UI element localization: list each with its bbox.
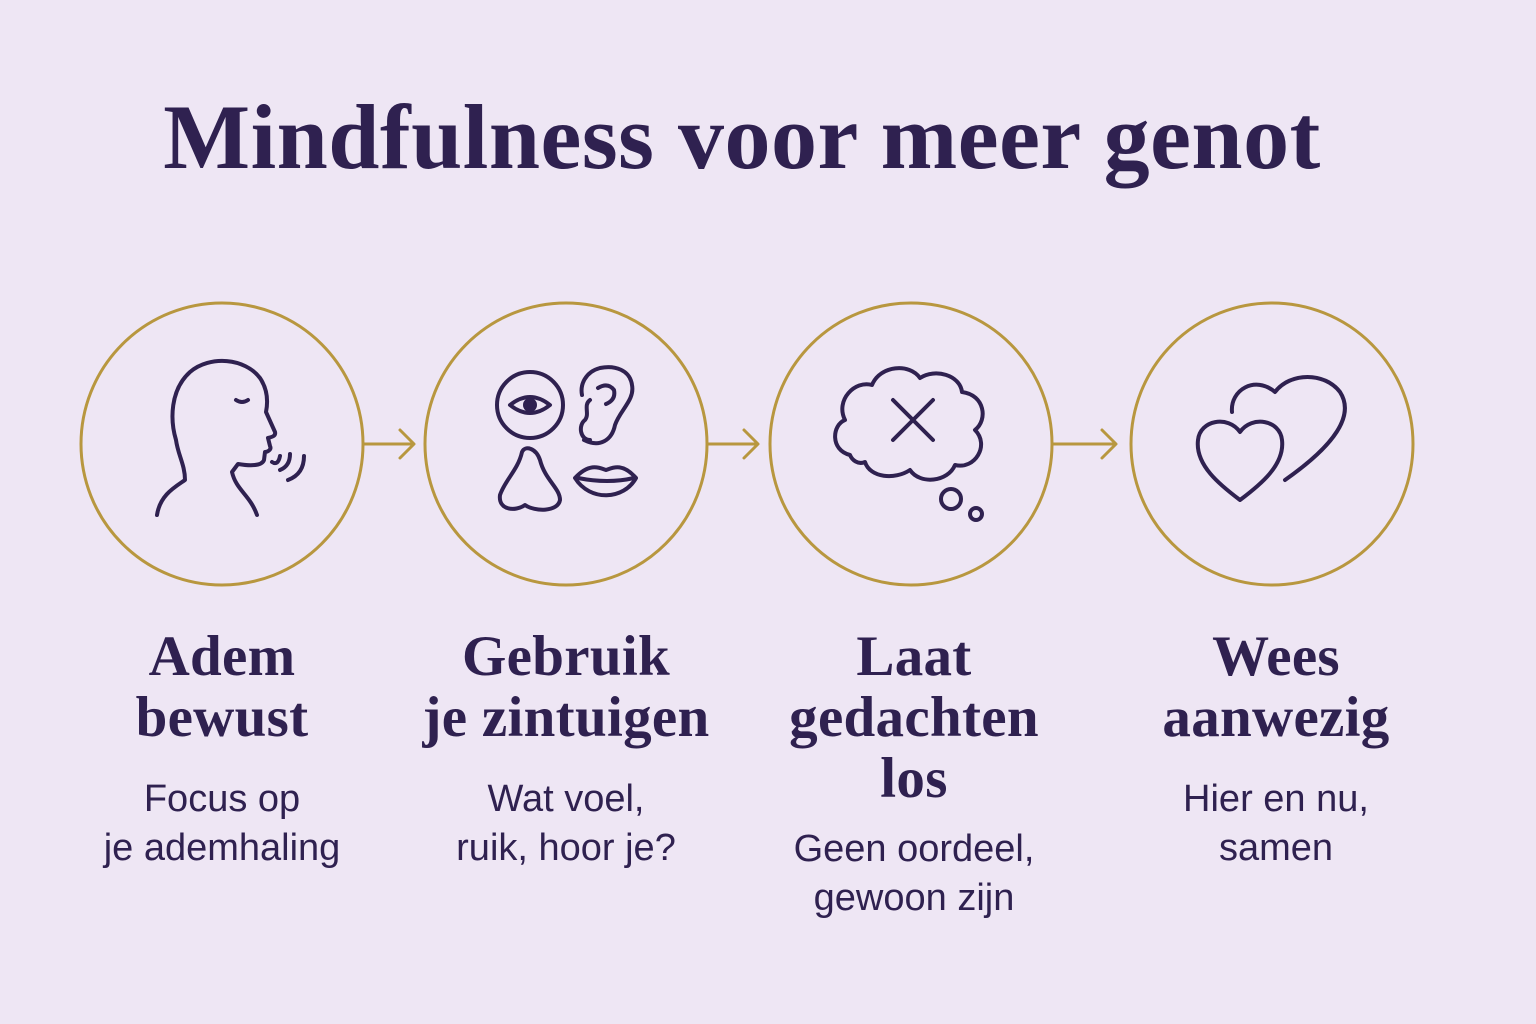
icon: thought cloud with X bbox=[835, 368, 983, 520]
circle 4 bbox=[1131, 303, 1413, 585]
step 4 text: samen bbox=[1219, 827, 1333, 869]
step 1 text: Adem bbox=[149, 625, 295, 688]
step 3 text bbox=[789, 625, 1039, 919]
step 1 text: bewust bbox=[136, 686, 308, 749]
icon: two hearts bbox=[1198, 377, 1345, 500]
step 2 text: Gebruik bbox=[462, 625, 670, 688]
circle 1 bbox=[81, 303, 363, 585]
step 3 text: gewoon zijn bbox=[814, 877, 1014, 919]
arrow 3 bbox=[1053, 430, 1116, 458]
step 4 text bbox=[1162, 625, 1390, 869]
arrow 2 bbox=[708, 430, 758, 458]
circle 3 bbox=[770, 303, 1052, 585]
step 3 text: gedachten bbox=[789, 686, 1039, 749]
step 2 text: ruik, hoor je? bbox=[456, 827, 676, 869]
step 1 text bbox=[102, 625, 340, 869]
icon: senses bbox=[497, 367, 636, 510]
arrow 1 bbox=[364, 430, 414, 458]
step 4 text: Hier en nu, bbox=[1183, 778, 1369, 820]
step 2 text: Wat voel, bbox=[488, 778, 644, 820]
step 4 text: Wees bbox=[1212, 625, 1340, 688]
step 3 text: Laat bbox=[856, 625, 972, 688]
step 3 text: Geen oordeel, bbox=[794, 828, 1034, 870]
circle 2 bbox=[425, 303, 707, 585]
step 1 text: je ademhaling bbox=[104, 827, 340, 869]
step 3 text: los bbox=[880, 747, 948, 810]
step 2 text bbox=[422, 625, 710, 869]
step 1 text: Focus op bbox=[144, 778, 300, 820]
title: Mindfulness voor meer genot bbox=[163, 86, 1321, 188]
icon: breathing head bbox=[157, 361, 304, 515]
step 2 text: je zintuigen bbox=[422, 686, 710, 749]
step 4 text: aanwezig bbox=[1162, 686, 1390, 749]
